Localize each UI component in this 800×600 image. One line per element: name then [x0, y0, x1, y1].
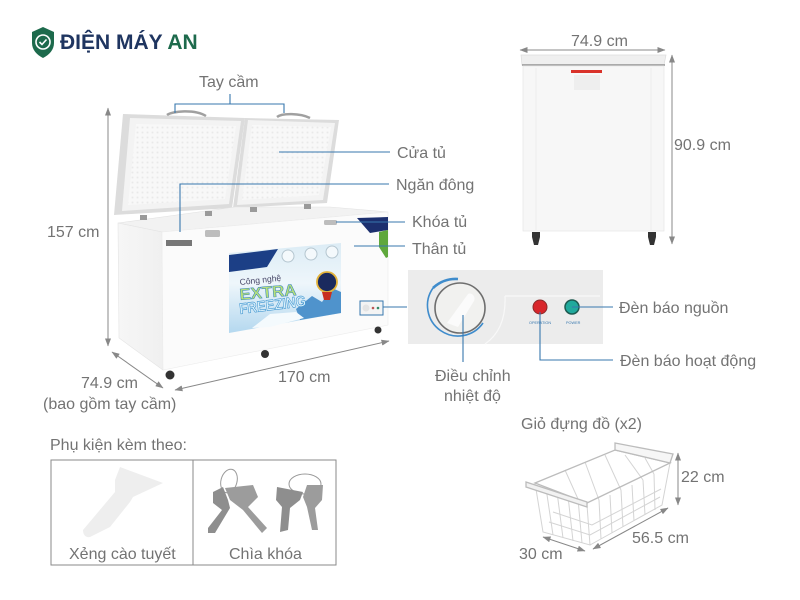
- lock left: [205, 230, 220, 237]
- control panel mini: [360, 301, 383, 315]
- label: Tay cầm: Tay cầm: [199, 74, 259, 91]
- table frame: [51, 460, 336, 565]
- side view wheels: [532, 232, 656, 245]
- label: Đèn báo hoạt động: Đèn báo hoạt động: [620, 353, 756, 370]
- green energy badge: [379, 230, 388, 258]
- icon: keys: [208, 467, 323, 533]
- side view body: [523, 66, 664, 231]
- brand strip: [229, 249, 278, 272]
- control panel close-up: POWER: [566, 321, 581, 325]
- accessories table: [51, 460, 336, 565]
- panel background: [408, 270, 603, 344]
- logo: Điện Máy An: [32, 27, 198, 58]
- label: Thân tủ: Thân tủ: [412, 241, 466, 258]
- side view lid: [521, 55, 666, 65]
- basket: [526, 443, 673, 545]
- key left 1: [208, 487, 230, 533]
- handles: [167, 111, 310, 118]
- label: Đèn báo nguồn: Đèn báo nguồn: [619, 300, 728, 317]
- control panel close-up: [408, 270, 603, 344]
- red lamp: [533, 300, 547, 314]
- label: Cửa tủ: Cửa tủ: [397, 145, 446, 162]
- label: Ngăn đông: Ngăn đông: [396, 177, 474, 194]
- inverter badge: [357, 217, 388, 233]
- front panel graphic: [229, 243, 341, 333]
- freezer: side view: [521, 55, 666, 245]
- hinges: [140, 204, 311, 220]
- dimension: side height 90.9 cm: 90.9 cm: [674, 137, 731, 154]
- lock right: [324, 220, 337, 225]
- freezer top opening: [118, 207, 388, 232]
- dial scale: [427, 288, 483, 336]
- dimension: basket depth 30 cm: [519, 537, 585, 563]
- dimension: side width 74.9 cm: 74.9 cm: [571, 33, 628, 50]
- label: Chìa khóa: Chìa khóa: [229, 546, 302, 563]
- accessories heading: Phụ kiện kèm theo:: [50, 437, 187, 454]
- basket wire: [535, 455, 670, 545]
- control panel close-up: OPERATION: [529, 321, 551, 325]
- left open lid: [114, 114, 245, 215]
- left side: [118, 223, 163, 370]
- icon: shield: [32, 27, 54, 58]
- mountains: [296, 288, 341, 320]
- key right 1: [276, 487, 303, 532]
- dimension: depth 74.9 cm: 74.9 cm: [81, 375, 138, 392]
- dimension: height 157 cm: 157 cm: [47, 224, 99, 241]
- right open lid: [233, 118, 339, 208]
- dimension: basket height 22 cm: [678, 453, 725, 505]
- front face: [162, 212, 388, 370]
- feature circles: [282, 246, 338, 262]
- label: Khóa tủ: Khóa tủ: [412, 214, 467, 231]
- basket rim: [526, 443, 673, 507]
- award badge: [317, 272, 337, 292]
- dimension: basket depth 30 cm: 30 cm: [519, 546, 563, 563]
- dial: [435, 283, 485, 333]
- icon: ice scraper: [83, 467, 163, 537]
- label: Điều chỉnh nhiệt độ: Điều chỉnh: [435, 368, 511, 385]
- basket heading: Giỏ đựng đồ (x2): [521, 416, 642, 433]
- brand name: ĐIỆN MÁY AN: [60, 30, 198, 54]
- key right 2: [303, 485, 323, 530]
- key ring left: [218, 467, 240, 495]
- dimension: depth 74.9 cm: [43, 352, 176, 413]
- key ring right: [289, 474, 321, 494]
- wheels: [166, 326, 382, 380]
- key left 2: [225, 485, 267, 533]
- dimension: basket length 56.5 cm: 56.5 cm: [632, 530, 689, 547]
- green lamp: [565, 300, 579, 314]
- front panel graphic: Công nghệ: [239, 273, 282, 287]
- front panel graphic: EXTRA: [239, 282, 298, 304]
- small brand mark: [166, 240, 192, 246]
- front panel graphic: FREEZING: [238, 293, 307, 318]
- dimension: width 170 cm: 170 cm: [278, 369, 330, 386]
- warning label: [571, 70, 602, 90]
- dimension: basket length 56.5 cm: [593, 508, 689, 549]
- callout lines: controls: [463, 307, 613, 362]
- label: Điều chỉnh nhiệt độ: nhiệt độ: [444, 388, 501, 405]
- dimension: width 170 cm: [175, 341, 389, 390]
- dimension: depth 74.9 cm: (bao gồm tay cầm): [43, 396, 176, 413]
- label: Xẻng cào tuyết: Xẻng cào tuyết: [69, 546, 176, 563]
- label: Điều chỉnh nhiệt độ: [435, 368, 511, 405]
- freezer: three-quarter view: [114, 111, 388, 380]
- dimension: basket height 22 cm: 22 cm: [681, 469, 725, 486]
- callout lines: freezer: [175, 94, 407, 307]
